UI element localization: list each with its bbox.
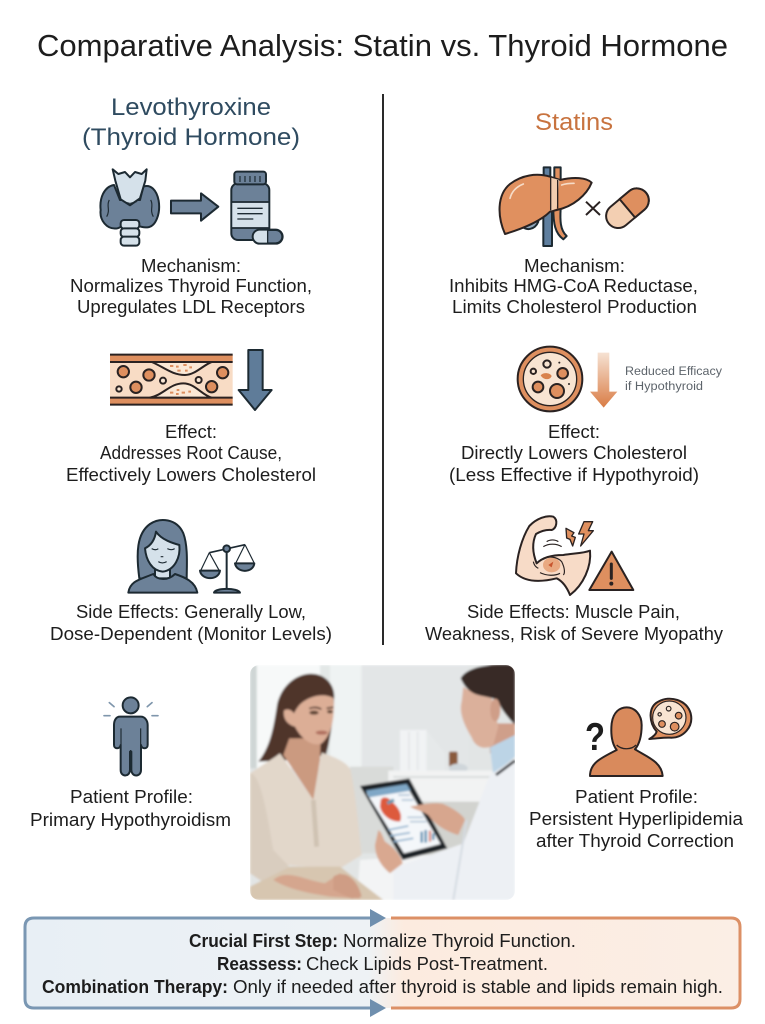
text: mechanism: Limits Cholesterol Production — [452, 296, 697, 317]
text: mechanism: Mechanism: — [141, 255, 241, 276]
text: side effects: Side Effects: Generally Low, — [76, 601, 306, 622]
text: patient profile: Patient Profile: — [575, 786, 698, 807]
text: patient profile — [529, 786, 744, 851]
text: effect: Effect: — [548, 421, 600, 442]
text: first step — [189, 931, 576, 951]
icon: thyroid, arrow and medicine bottle — [100, 169, 283, 246]
text: mechanism — [449, 255, 698, 317]
text: mechanism: Upregulates LDL Receptors — [77, 296, 305, 317]
heading: levothyroxine — [82, 94, 300, 151]
text: patient profile: Primary Hypothyroidism — [30, 809, 231, 830]
heading: statins: Statins — [535, 109, 613, 136]
text: side effects — [425, 601, 724, 644]
text: patient profile: after Thyroid Correction — [536, 830, 734, 851]
heading: levothyroxine: (Thyroid Hormone) — [82, 124, 300, 151]
label: reduced efficacy: Reduced Efficacy — [625, 364, 723, 378]
icon: patient with question and plaque thought bubble — [585, 699, 691, 776]
label: reduced efficacy — [625, 364, 723, 393]
photo: doctor showing tablet to patient — [250, 665, 515, 900]
icon: standing patient — [104, 697, 158, 775]
icon: flexed arm with pain bolts and warning — [516, 516, 633, 595]
text: patient profile: Persistent Hyperlipidemia — [529, 808, 744, 829]
text: first step: Normalize Thyroid Function. — [343, 931, 576, 951]
panel: levothyroxine — [30, 94, 332, 830]
text: patient profile — [30, 786, 231, 830]
text: side effects: Weakness, Risk of Severe Myopathy — [425, 623, 724, 644]
text: reassess: Check Lipids Post-Treatment. — [306, 954, 548, 974]
text: combination therapy: Combination Therapy: — [42, 977, 228, 997]
woman hair (back) — [258, 674, 334, 762]
title: Comparative Analysis: Statin vs. Thyroid Hormone — [37, 28, 728, 63]
text: combination therapy — [42, 977, 723, 997]
text: side effects — [50, 601, 332, 644]
border: orange — [391, 918, 740, 1008]
text: side effects: Dose-Dependent (Monitor Levels) — [50, 623, 332, 644]
text: mechanism — [70, 255, 312, 317]
icon: patient with question and plaque thought bubble: ? — [585, 716, 605, 759]
text: reassess: Reassess: — [217, 954, 302, 974]
icon: artery cross-section with reduced efficacy arrow — [518, 347, 723, 411]
text: side effects: Side Effects: Muscle Pain, — [467, 601, 680, 622]
text: combination therapy: Only if needed after thyroid is stable and lipids remain high. — [233, 977, 723, 997]
text: mechanism: Mechanism: — [524, 255, 625, 276]
text: effect — [66, 421, 316, 485]
panel: statins — [425, 109, 744, 851]
arrow border: blue — [25, 909, 386, 1017]
text: effect: (Less Effective if Hypothyroid) — [449, 464, 699, 485]
text: effect: Directly Lowers Cholesterol — [461, 442, 687, 463]
text: patient profile: Patient Profile: — [70, 786, 193, 807]
callout: recommendation box — [25, 909, 740, 1017]
heading: levothyroxine: Levothyroxine — [111, 94, 271, 121]
label: reduced efficacy: if Hypothyroid — [625, 379, 703, 393]
text: first step: Crucial First Step: — [189, 931, 338, 951]
text: mechanism: Inhibits HMG-CoA Reductase, — [449, 275, 698, 296]
text: mechanism: Normalizes Thyroid Function, — [70, 275, 312, 296]
icon: artery with down arrow — [110, 350, 272, 410]
icon: woman and balance scales — [128, 520, 254, 593]
text: effect: Effect: — [165, 421, 217, 442]
text: effect — [449, 421, 699, 485]
text: effect: Addresses Root Cause, — [100, 442, 282, 463]
doctor head — [488, 723, 515, 753]
text: effect: Effectively Lowers Cholesterol — [66, 464, 316, 485]
icon: liver and crossed capsule — [500, 167, 654, 246]
